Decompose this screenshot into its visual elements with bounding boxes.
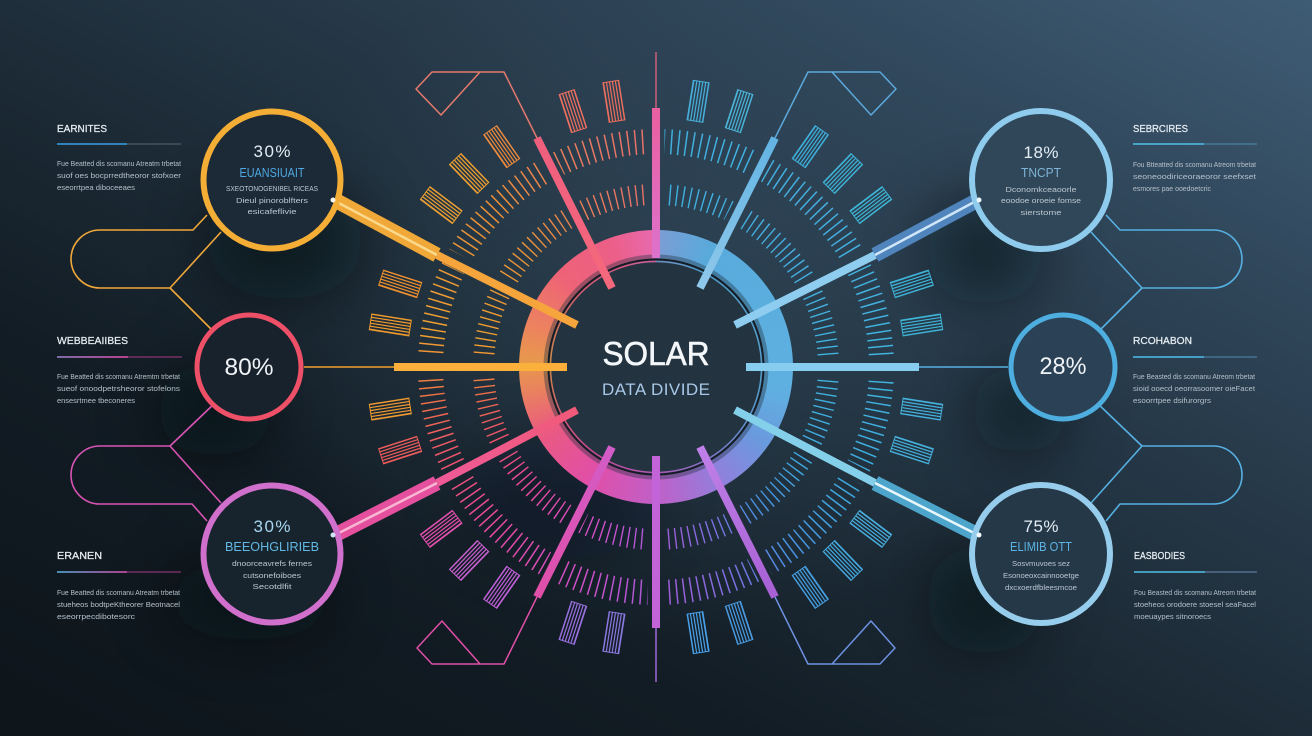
stat circle: middle left [197, 315, 301, 419]
text block: bottom left: stueheos bodtpeKtheorer Beotnacel [57, 600, 180, 609]
text block: top left: Fue Beatted dis scomanu Atreatm trbetat [57, 159, 182, 168]
stat circle: bottom left: 30% [254, 517, 290, 536]
stat circle: bottom left [204, 486, 340, 622]
stat circle: bottom left: BEEOHGLIRIEB [225, 540, 319, 554]
hatched outer blocks [369, 80, 943, 654]
text block: middle right [1133, 336, 1257, 405]
text block: top left: eseorrtpea diboceeaes [57, 183, 135, 192]
centre title: SOLAR [602, 335, 710, 372]
stat circle: top right: Dconomkceaoorle [1006, 185, 1076, 194]
spoke: upper right steep [700, 138, 775, 288]
text block: middle right: RCOHABON [1133, 336, 1192, 347]
centre title [602, 335, 710, 399]
spoke: lower right wide [735, 410, 978, 535]
text block: top right: seoneoodiriceoraeoror seefxset [1133, 172, 1257, 181]
angular outline: top left [416, 72, 537, 138]
text block: bottom right: moeuaypes sitnoroecs [1134, 612, 1211, 621]
stat circle: middle right: 28% [1040, 353, 1086, 380]
angular outline: bottom right [775, 597, 895, 664]
stat circle: top left: esicafeflivie [248, 207, 296, 216]
text block: top left: EARNITES [57, 124, 107, 135]
text block: middle left [57, 336, 182, 405]
connector: bottom right loop [1091, 402, 1242, 521]
stat circle: top left: EUANSIUAIT [240, 166, 305, 180]
spoke: upper left steep [537, 138, 612, 288]
text block: bottom left: eseorrpecdibotesorc [57, 612, 135, 621]
text block: middle right: esoorrtpee dsifurorgrs [1133, 396, 1211, 405]
spoke: lower right steep [700, 447, 775, 597]
angular outline: top right [775, 72, 896, 138]
stat circle: bottom right: Sosvmuvoes sez [1012, 559, 1070, 568]
text block: middle right: Fue Beasted dis scomanu Atreom trbetat [1133, 372, 1256, 381]
connector: top left loop [71, 215, 221, 334]
stat circle: bottom right: Esonoeoxcainnooetge [1003, 571, 1079, 580]
stat circle: bottom right: ELIMIB OTT [1010, 540, 1072, 554]
spoke: bottom [655, 456, 657, 682]
text block: top right [1133, 124, 1257, 193]
spoke: upper left wide [335, 200, 577, 325]
text block: top right: SEBRCIRES [1133, 124, 1188, 135]
spoke: right [746, 366, 1008, 368]
stat circle: top left: 30% [254, 142, 290, 161]
text block: bottom left [57, 551, 181, 621]
text block: top right: esmores pae ooedoetcric [1133, 184, 1211, 193]
stat circle: bottom right [972, 485, 1110, 623]
text block: middle right: sioid ooecd oeorrasoomer oieFacet [1133, 384, 1256, 393]
text block: middle left: WEBBEAIIBES [57, 336, 128, 347]
text block: bottom right: EASBODIES [1134, 551, 1185, 562]
central gradient ring [519, 230, 793, 504]
spoke: lower left steep [537, 447, 612, 597]
text block: bottom right [1134, 551, 1257, 621]
connector: bottom left loop [71, 402, 221, 521]
stat circle: bottom left: dnoorceavrefs fernes [232, 559, 312, 568]
stat circle: top right: 18% [1024, 143, 1058, 162]
stat circle: top left: Dieul pinoroblfters [236, 196, 308, 205]
stat circle: middle left: 80% [224, 354, 274, 381]
text block: middle left: Fue Beatted dis scomanu Atremtm trbetat [57, 372, 181, 381]
stat circle: bottom right: 75% [1024, 517, 1058, 536]
stat circle: top right [972, 111, 1110, 249]
stat circle: bottom right: dxcxoerdfbleesmcoe [1005, 583, 1077, 592]
stat circle: top right: sierstome [1020, 208, 1062, 217]
stat circle: top right: TNCPT [1021, 166, 1061, 180]
centre title: DATA DIVIDE [602, 380, 710, 399]
stat circle: bottom left: Secotdlfit [252, 582, 293, 591]
text block: bottom left: Fue Beatted dis scomanu Atreatm trbetat [57, 588, 181, 597]
radial tick rings [418, 129, 894, 605]
text block: bottom left: ERANEN [57, 551, 102, 562]
stat circle: top left [204, 112, 340, 248]
text block: middle left: sueof onoodpetrsheoror stofelons [57, 384, 180, 393]
text block: middle left: ensesrtmee tbeconeres [57, 396, 135, 405]
connector: top right loop [1091, 215, 1242, 334]
spokes [304, 52, 1008, 682]
stat circle: top left: SXEOTONOGENIBEL RICEAS [226, 184, 318, 193]
text block: top left [57, 124, 182, 192]
spoke: top [655, 52, 657, 258]
text block: bottom right: Fou Beasted dis scomanu Atreom trbetat [1134, 588, 1257, 597]
spoke: lower left wide [335, 410, 577, 535]
stat circle: top right: eoodoe oroeie fomse [1001, 196, 1081, 205]
stat circle: middle right [1011, 315, 1115, 419]
soft circle shadows [155, 180, 1070, 655]
text block: top left: suof oes bocprredtheoror stofxoer [57, 171, 182, 180]
spoke: left [304, 366, 567, 368]
angular outline: bottom left [417, 597, 537, 664]
text block: top right: Fou Btteatted dis scomanu Atreom trbetat [1133, 160, 1257, 169]
text block: bottom right: stoeheos orodoere stoesel seaFacel [1134, 600, 1256, 609]
spoke: upper right wide [735, 200, 978, 325]
stat circle: bottom left: cutsonefoiboes [243, 571, 301, 580]
